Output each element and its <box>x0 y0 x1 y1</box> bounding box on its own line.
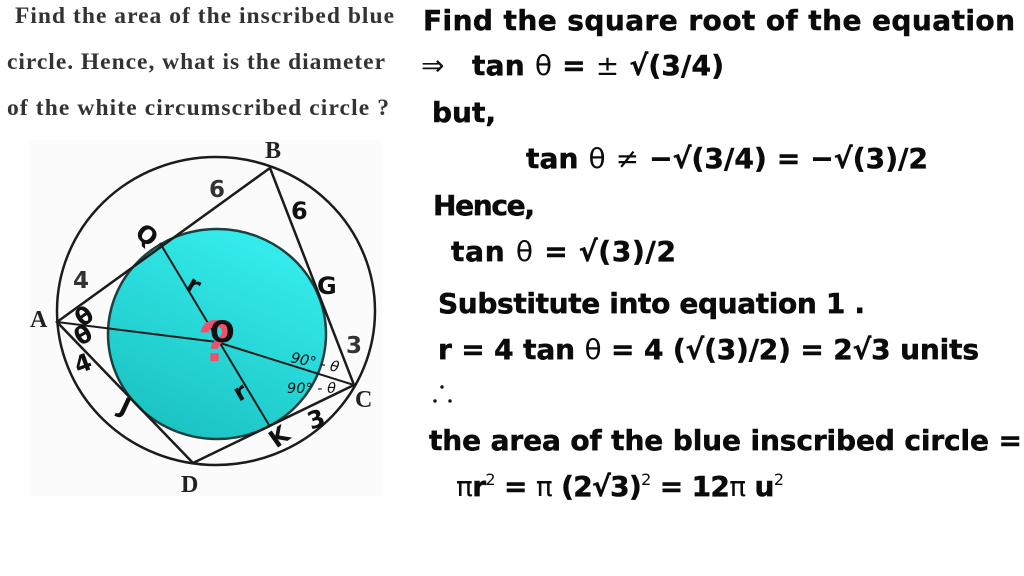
solution: square root step: Find the square root of the equation <box>423 4 1015 37</box>
solution: rejected negative root: but, <box>432 96 496 129</box>
side length labels: 6 <box>291 197 308 225</box>
point label O: O <box>210 315 235 349</box>
side length labels: 3 <box>346 333 362 359</box>
solution: square root step: ⇒ <box>421 49 444 82</box>
solution: area result: = 12 <box>651 470 730 503</box>
question text: of the white circumscribed circle ? <box>7 95 389 121</box>
solution: area result: 2 <box>485 470 496 489</box>
tangent point labels: J <box>113 391 135 421</box>
vertex labels: C <box>355 387 372 413</box>
side length labels: 4 <box>70 348 96 380</box>
tangent point labels: Q <box>130 218 164 253</box>
solution: area result <box>429 424 1022 503</box>
solution: substitution: Substitute into equation 1 . <box>438 287 865 320</box>
angle labels at C <box>287 350 341 397</box>
solution: area result: π (2√3) <box>536 470 642 503</box>
solution: area result: = <box>495 470 537 503</box>
circumscribed white circle <box>57 157 375 465</box>
quadrilateral ABCD <box>57 168 354 463</box>
side length labels: 4 <box>73 268 89 294</box>
solution: positive root: Hence, <box>433 189 535 222</box>
solution: rejected negative root: tan θ ≠ −√(3/4) = −√(3)/2 <box>526 142 928 175</box>
side length labels: 6 <box>209 177 225 203</box>
solution: area result: 2 <box>641 470 651 489</box>
solution: substitution: r = 4 tan θ = 4 (√(3)/2) = 2√3 units <box>438 333 979 366</box>
solution: area result: π u <box>729 470 774 503</box>
question text: circle. Hence, what is the diameter <box>7 49 385 75</box>
vertex labels: D <box>181 472 198 498</box>
angle labels at C: 90° - θ <box>287 381 336 397</box>
solution: square root step: tan θ = ± √(3/4) <box>472 49 724 82</box>
side length labels: 3 <box>304 404 329 436</box>
solution: area result: πr <box>456 470 486 503</box>
radius line QK <box>160 243 269 425</box>
vertex labels <box>30 138 372 498</box>
tangent point labels <box>113 218 337 454</box>
theta angle labels: θ <box>69 319 97 352</box>
solution: substitution <box>438 287 979 366</box>
radius labels <box>182 270 252 407</box>
solution: positive root: tan θ = √(3)/2 <box>451 235 676 268</box>
question text <box>7 3 394 121</box>
vertex labels: B <box>265 138 281 164</box>
tangent point labels: K <box>264 419 296 454</box>
solution: rejected negative root <box>432 96 928 175</box>
solution: area result: the area of the blue inscribed circle = <box>429 424 1022 457</box>
angle labels at C: 90° - θ <box>289 350 341 376</box>
therefore symbol <box>433 385 452 403</box>
line AC through centre <box>57 322 354 385</box>
red question mark: ? <box>198 309 233 374</box>
solution: positive root <box>433 189 676 268</box>
question text: Find the area of the inscribed blue <box>15 3 394 29</box>
side length labels <box>70 177 362 436</box>
solution: square root step <box>421 4 1015 82</box>
solution: area result: 2 <box>774 470 784 489</box>
theta angle labels: θ <box>70 300 99 333</box>
radius labels: r <box>182 270 206 300</box>
geometry diagram <box>30 138 382 498</box>
vertex labels: A <box>30 307 48 333</box>
tangent point labels: G <box>317 272 337 300</box>
inscribed blue circle <box>108 229 326 439</box>
theta angle labels <box>69 300 99 352</box>
radius labels: r <box>228 377 252 407</box>
